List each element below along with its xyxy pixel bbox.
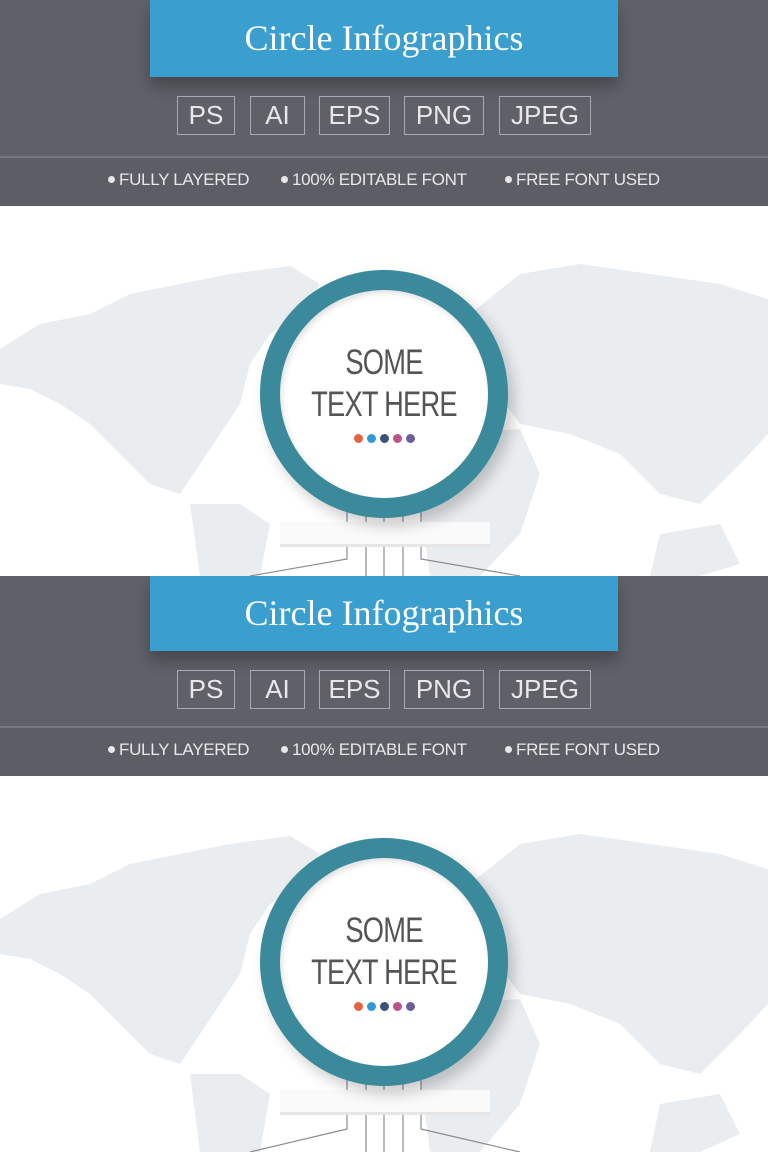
header panel	[0, 576, 768, 774]
connector lines	[250, 512, 520, 576]
circle text: SOME	[345, 343, 423, 382]
connector lines	[250, 1080, 520, 1152]
feature bullets: FREE FONT USED	[516, 170, 660, 189]
bullet band	[0, 156, 768, 206]
format boxes: PS	[189, 100, 223, 130]
world map	[0, 834, 768, 1152]
section 1	[0, 0, 768, 576]
format boxes: PS	[189, 674, 223, 704]
feature bullets: 100% EDITABLE FONT	[292, 740, 467, 759]
circle text	[311, 911, 457, 1011]
bullet band	[0, 726, 768, 776]
feature bullets	[108, 170, 660, 189]
title banner: Circle Infographics	[245, 18, 523, 58]
section 2	[0, 576, 768, 1152]
color dots	[354, 1002, 415, 1011]
format boxes: JPEG	[511, 100, 579, 130]
circle text	[311, 343, 457, 443]
format boxes: AI	[265, 674, 290, 704]
format boxes: AI	[265, 100, 290, 130]
feature bullets: FULLY LAYERED	[119, 170, 249, 189]
title banner	[150, 576, 618, 651]
title banner	[150, 0, 618, 77]
title banner: Circle Infographics	[245, 593, 523, 633]
format boxes: EPS	[328, 100, 381, 130]
feature bullets: 100% EDITABLE FONT	[292, 170, 467, 189]
format boxes: JPEG	[511, 674, 579, 704]
feature bullets	[108, 740, 660, 759]
feature bullets: FREE FONT USED	[516, 740, 660, 759]
circle text: SOME	[345, 911, 423, 950]
format boxes: EPS	[328, 674, 381, 704]
world map with circle	[0, 834, 768, 1152]
circle text: TEXT HERE	[311, 953, 457, 992]
world map	[0, 264, 768, 576]
feature bullets: FULLY LAYERED	[119, 740, 249, 759]
world map with circle	[0, 264, 768, 576]
color dots	[354, 434, 415, 443]
center circle	[260, 270, 508, 518]
format boxes: PNG	[416, 100, 472, 130]
format boxes	[177, 670, 591, 709]
header panel	[0, 0, 768, 204]
format boxes	[177, 96, 591, 135]
format boxes: PNG	[416, 674, 472, 704]
circle text: TEXT HERE	[311, 385, 457, 424]
center circle	[260, 838, 508, 1086]
